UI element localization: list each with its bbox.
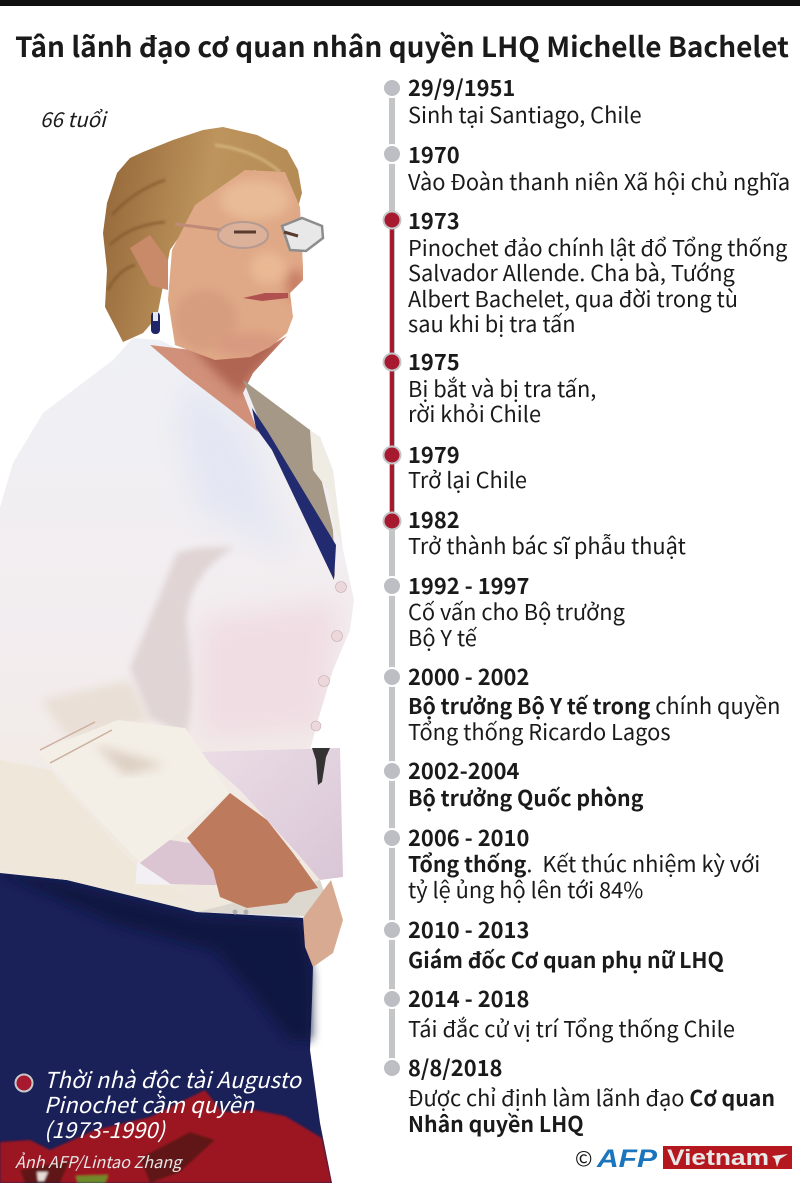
lapel (310, 430, 342, 545)
entry: 2014 - 2018 (408, 983, 735, 1044)
entry: 2014 - 2018: Tái đắc cử vị trí Tổng thống Chile (408, 1013, 735, 1044)
entry: 1973: Albert Bachelet, qua đời trong tù (408, 283, 738, 314)
entry: 1982: Trở thành bác sĩ phẫu thuật (408, 530, 686, 561)
face shading (173, 180, 306, 357)
entry: 29/9/1951: 29/9/1951 (408, 72, 515, 103)
entry: 1992 - 1997: 1992 - 1997 (408, 570, 529, 601)
logos (575, 1143, 792, 1173)
entry: 2006 - 2010: tỷ lệ ủng hộ lên tới 84% (408, 874, 643, 905)
entry: 1979: Trở lại Chile (408, 464, 527, 495)
age label: 66 tuổi (40, 103, 108, 133)
entry: 1970: 1970 (408, 139, 460, 170)
entry: 1982 (408, 504, 686, 561)
hand (187, 793, 318, 908)
legend: Pinochet era: Pinochet cầm quyền (44, 1088, 256, 1120)
entry: 2006 - 2010 (408, 822, 760, 905)
entry: 1975 (408, 346, 596, 429)
entry: 1979 (408, 439, 527, 495)
neck (150, 336, 287, 432)
jacket shading (0, 380, 340, 905)
entry: 8/8/2018: 8/8/2018 (408, 1052, 502, 1083)
entry: 2002-2004: 2002-2004 (408, 755, 520, 786)
legend: Pinochet era (16, 1063, 303, 1145)
entry: 2010 - 2013: 2010 - 2013 (408, 914, 529, 945)
entry: 1973: Salvador Allende. Cha bà, Tướng (408, 257, 735, 288)
entry: 2010 - 2013 (408, 914, 724, 975)
logos: AFP (596, 1145, 657, 1173)
hair (103, 127, 302, 342)
entry: 1973 (408, 205, 787, 339)
entry: 2000 - 2002 (408, 661, 780, 747)
sleeve folds (40, 722, 165, 775)
logos: © (575, 1143, 592, 1173)
entry: 1975: Bị bắt và bị tra tấn, (408, 373, 596, 404)
top black bar (0, 0, 800, 6)
jacket (0, 338, 354, 917)
neck redness (190, 340, 285, 395)
sleeve (38, 720, 230, 863)
entry: 1975: rời khỏi Chile (408, 398, 541, 429)
legend: Pinochet era: Thời nhà độc tài Augusto (44, 1063, 303, 1095)
lower hand (303, 880, 343, 967)
flowers (0, 1090, 332, 1183)
buttons (311, 582, 346, 731)
entry: 1973: 1973 (408, 205, 460, 236)
folder (135, 748, 343, 885)
entry: 1970: Vào Đoàn thanh niên Xã hội chủ nghĩa (408, 166, 790, 197)
entry: 2006 - 2010: Tổng thống. Kết thúc nhiệm kỳ với (408, 848, 760, 879)
hair strands (108, 145, 280, 290)
timeline rail (389, 88, 395, 1068)
entry: 2000 - 2002: 2000 - 2002 (408, 661, 529, 692)
entry: 2014 - 2018: 2014 - 2018 (408, 983, 529, 1014)
entry: 1973: Pinochet đảo chính lật đổ Tổng thống (408, 232, 787, 263)
timeline dots (383, 79, 401, 1077)
logos: Vietnam (667, 1145, 769, 1170)
glasses (175, 218, 323, 251)
entry: 29/9/1951: Sinh tại Santiago, Chile (408, 99, 642, 130)
skirt (0, 870, 332, 1183)
entry: 2002-2004: Bộ trưởng Quốc phòng (408, 782, 644, 813)
entry: 1979: 1979 (408, 439, 460, 470)
entry: 8/8/2018: Nhân quyền LHQ (408, 1108, 584, 1139)
entry: 2000 - 2002: Bộ trưởng Bộ Y tế trong chính quyền (408, 690, 780, 721)
entry: 1982: 1982 (408, 504, 460, 535)
entry: 2002-2004 (408, 755, 644, 813)
face (168, 170, 303, 360)
photo credit: Ảnh AFP/Lintao Zhang (15, 1149, 183, 1173)
entry: 1992 - 1997: Cố vấn cho Bộ trưởng (408, 596, 625, 627)
entry: 1975: 1975 (408, 346, 460, 377)
entry: 1992 - 1997: Bộ Y tế (408, 622, 478, 653)
lining (243, 380, 335, 577)
portrait illustration: Michelle Bachelet (0, 127, 354, 1183)
ear and earring (130, 235, 168, 334)
rings (232, 910, 248, 914)
blouse strip (252, 408, 336, 580)
entry: 8/8/2018: Được chỉ định làm lãnh đạo Cơ quan (408, 1082, 775, 1113)
mouth (243, 293, 288, 301)
entry: 29/9/1951 (408, 72, 642, 130)
entry: 8/8/2018 (408, 1052, 775, 1139)
entry: 1970 (408, 139, 790, 197)
entry: 2006 - 2010: 2006 - 2010 (408, 822, 529, 853)
legend: Pinochet era: (1973-1990) (44, 1113, 167, 1145)
entry: 2000 - 2002: Tổng thống Ricardo Lagos (408, 716, 671, 747)
title: Tân lãnh đạo cơ quan nhân quyền LHQ Michelle Bachelet (15, 26, 789, 66)
jacket hem (197, 880, 333, 917)
entry: 1992 - 1997 (408, 570, 625, 653)
entry: 2010 - 2013: Giám đốc Cơ quan phụ nữ LHQ (408, 944, 724, 975)
shadow between arm and torso (130, 547, 235, 735)
entry: 1973: sau khi bị tra tấn (408, 308, 576, 339)
